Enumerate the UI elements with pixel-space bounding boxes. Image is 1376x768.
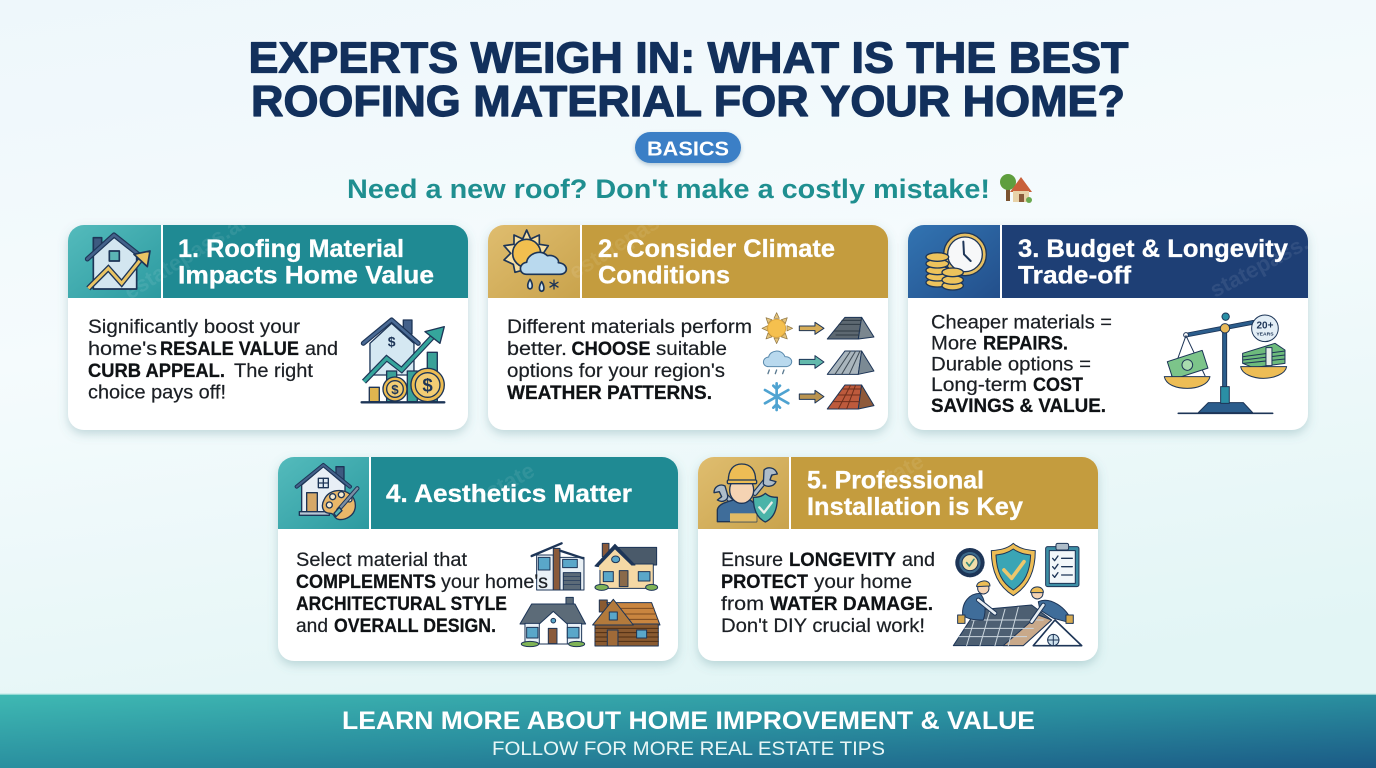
card 2 body text: CHOOSE xyxy=(572,339,650,360)
icon: house with rising arrow xyxy=(87,235,150,289)
card 4 body text xyxy=(296,550,548,637)
icon: four house styles xyxy=(520,543,660,647)
card 3 body text: Durable options = xyxy=(931,354,1091,376)
icon: balance scale with money: 20+ xyxy=(1256,320,1274,331)
cottage xyxy=(595,543,658,590)
card 5 body text: Ensure xyxy=(721,550,783,571)
card 3 body text: REPAIRS. xyxy=(983,334,1068,354)
icon: climate to roof type chart xyxy=(762,313,874,410)
card 4 body text: COMPLEMENTS xyxy=(296,572,436,593)
card 2 heading: 2. Consider Climate xyxy=(598,235,835,263)
card 4 body text: your home's xyxy=(441,572,548,593)
card 5 icon panel xyxy=(698,457,789,529)
card 1 body text xyxy=(88,317,338,404)
panel: card 4 aesthetics xyxy=(278,457,678,661)
title: EXPERTS WEIGH IN: WHAT IS THE BEST xyxy=(248,34,1129,82)
card 3 body text: COST xyxy=(1033,375,1083,396)
card 3 body text: More xyxy=(931,334,977,354)
panel: card 2 climate: estatepass xyxy=(564,203,674,284)
card 1 body text: Significantly boost your xyxy=(88,317,301,338)
card 5 heading band xyxy=(791,457,1098,529)
panel: card 4 aesthetics: estate xyxy=(471,457,538,509)
shield xyxy=(991,543,1035,596)
card 5 body text: from xyxy=(721,594,764,615)
card 5 body text: LONGEVITY xyxy=(789,550,896,571)
left roofer xyxy=(958,581,995,623)
card 1 icon panel xyxy=(68,225,161,298)
badge: basics xyxy=(635,132,741,163)
icon: house with paint palette xyxy=(297,465,357,520)
card 1 body text: and xyxy=(305,339,338,360)
panel: card 3 budget xyxy=(908,225,1312,430)
icon: home value growth chart: $ xyxy=(391,382,399,397)
gear xyxy=(957,550,983,575)
card 5 body text: PROTECT xyxy=(721,572,808,593)
card 4 heading: 4. Aesthetics Matter xyxy=(386,480,632,508)
roof and house gable xyxy=(953,605,1082,646)
card 1 body text: choice pays off! xyxy=(88,382,226,404)
card 2 body text: options for your region's xyxy=(507,361,725,382)
card 1 heading band xyxy=(163,225,468,298)
card 3 body text: Cheaper materials = xyxy=(931,312,1112,334)
icon: home value growth chart: $ xyxy=(422,375,433,396)
panel: card 5 professional installation xyxy=(698,448,1098,661)
card 4 icon panel xyxy=(278,457,369,529)
card 5 body text: Don't DIY crucial work! xyxy=(721,616,925,637)
card 3 icon panel xyxy=(908,225,1000,298)
card 3 heading: Trade-off xyxy=(1018,262,1132,290)
card 1 heading: 1. Roofing Material xyxy=(178,235,404,263)
card 3 heading band xyxy=(1002,225,1308,298)
card 3 heading xyxy=(1018,235,1288,290)
card 5 heading xyxy=(807,466,1023,521)
card 1 heading: Impacts Home Value xyxy=(178,262,434,290)
gray roof house xyxy=(520,597,586,647)
card 1 body text: The right xyxy=(234,361,314,382)
snow to clay tile roof xyxy=(765,383,874,410)
panel: card 5 professional installation: state xyxy=(871,448,928,494)
panel: card 2 climate xyxy=(488,203,888,430)
card 5 body text xyxy=(721,550,935,637)
icon: home value growth chart: $ xyxy=(388,334,396,350)
icon: home value growth chart xyxy=(362,320,444,402)
card 5 heading: 5. Professional xyxy=(807,466,984,494)
card 2 body text: better. xyxy=(507,339,567,360)
card 4 body text: OVERALL DESIGN. xyxy=(334,616,496,637)
card 3 body text: Long-term xyxy=(931,375,1027,396)
card 4 body text: and xyxy=(296,616,328,637)
footer subline: FOLLOW FOR MORE REAL ESTATE TIPS xyxy=(492,738,885,760)
rain to metal roof xyxy=(763,351,874,374)
icon: house with tree emoji xyxy=(1000,174,1032,203)
card 4 body text: ARCHITECTURAL STYLE xyxy=(296,594,507,615)
badge: basics: BASICS xyxy=(647,138,729,160)
card 5 heading: Installation is Key xyxy=(807,493,1023,521)
footer band xyxy=(0,694,1376,768)
panel: card 1 roofing material xyxy=(68,210,468,430)
card 1 heading xyxy=(178,235,434,290)
icon: clock and coins xyxy=(926,233,986,290)
checklist xyxy=(1046,543,1079,587)
subtitle: Need a new roof? Don't make a costly mistake! xyxy=(347,174,990,204)
card 1 body text: home's xyxy=(88,339,157,360)
card 2 heading band xyxy=(582,225,888,298)
card 2 body text: Different materials perform xyxy=(507,317,752,338)
panel: card 3 budget: statepass. xyxy=(1206,230,1312,302)
card 4 heading band xyxy=(371,457,678,529)
card 3 body text xyxy=(931,312,1112,417)
card 1 body text: CURB APPEAL. xyxy=(88,361,225,382)
card 5 body text: WATER DAMAGE. xyxy=(770,594,933,615)
sun to shingle roof xyxy=(762,313,874,344)
card 2 heading: Conditions xyxy=(598,262,730,290)
card 2 body text: suitable xyxy=(656,339,727,360)
card 4 body text: Select material that xyxy=(296,550,468,571)
card 5 body text: and xyxy=(902,550,935,571)
card 3 heading: 3. Budget & Longevity xyxy=(1018,235,1288,263)
card 5 body text: your home xyxy=(814,572,912,593)
footer headline: LEARN MORE ABOUT HOME IMPROVEMENT & VALUE xyxy=(342,707,1035,735)
title xyxy=(248,34,1129,126)
log cabin xyxy=(593,599,660,646)
icon: balance scale with money xyxy=(1164,313,1287,413)
card 2 heading xyxy=(598,235,835,290)
icon: worker with tools and shield xyxy=(714,464,777,522)
panel: card 1 roofing material: estatepass.ai xyxy=(119,210,250,304)
card 3 body text: SAVINGS & VALUE. xyxy=(931,396,1106,417)
modern house xyxy=(532,543,584,590)
right roofer xyxy=(1031,587,1073,623)
icon: roofers, shield, gear and checklist xyxy=(953,543,1082,646)
title: ROOFING MATERIAL FOR YOUR HOME? xyxy=(251,77,1125,126)
card 2 icon panel xyxy=(488,225,580,298)
icon: sun, cloud, rain and snow xyxy=(504,230,566,291)
card 2 body text xyxy=(507,317,752,404)
card 2 body text: WEATHER PATTERNS. xyxy=(507,383,712,404)
card 1 body text: RESALE VALUE xyxy=(160,339,299,360)
icon: balance scale with money: YEARS xyxy=(1256,332,1274,338)
